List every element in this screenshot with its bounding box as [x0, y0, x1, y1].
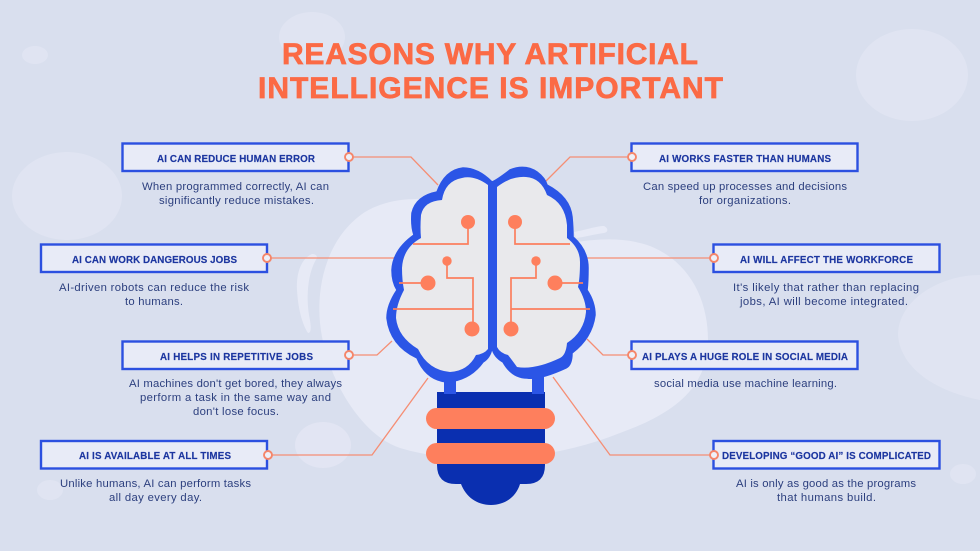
panel: repetitive jobs: don't lose focus. — [193, 406, 279, 418]
panel: social media: AI PLAYS A HUGE ROLE IN SOCIAL MEDIA — [642, 352, 848, 363]
panel: available at all times: AI IS AVAILABLE AT ALL TIMES — [79, 451, 231, 462]
panel: good AI is complicated: AI is only as good as the programs — [736, 478, 916, 490]
panel: dangerous jobs: AI-driven robots can reduce the risk — [59, 282, 249, 294]
panel: dangerous jobs — [41, 244, 271, 308]
icon: light bulb base — [426, 392, 555, 505]
title: INTELLIGENCE IS IMPORTANT — [258, 72, 723, 105]
panel: available at all times: all day every day. — [109, 492, 202, 504]
icon: brain — [387, 167, 595, 394]
panel: works faster: AI WORKS FASTER THAN HUMANS — [659, 154, 831, 165]
panel: good AI is complicated: DEVELOPING “GOOD AI” IS COMPLICATED — [722, 451, 931, 462]
panel: repetitive jobs — [122, 342, 353, 418]
panel: affect the workforce — [710, 244, 940, 308]
panel: affect the workforce: It's likely that rather than replacing — [733, 282, 919, 294]
panel: social media: social media use machine learning. — [654, 378, 837, 390]
panel: repetitive jobs: perform a task in the same way and — [140, 392, 331, 404]
panel: good AI is complicated: that humans build. — [777, 492, 876, 504]
panel: dangerous jobs: to humans. — [125, 296, 183, 308]
panel: affect the workforce: AI WILL AFFECT THE WORKFORCE — [740, 255, 913, 266]
panel: affect the workforce: jobs, AI will become integrated. — [739, 296, 908, 308]
connector lines — [267, 157, 714, 455]
panel: repetitive jobs: AI machines don't get bored, they always — [129, 378, 342, 390]
panel: reduce human error: When programmed correctly, AI can — [142, 181, 329, 193]
panel: reduce human error — [122, 144, 353, 207]
panel: reduce human error: significantly reduce mistakes. — [159, 195, 314, 207]
panel: social media — [628, 342, 858, 390]
circuit traces — [393, 215, 590, 336]
panel: works faster: for organizations. — [699, 195, 791, 207]
panel: reduce human error: AI CAN REDUCE HUMAN ERROR — [157, 154, 315, 165]
panel: dangerous jobs: AI CAN WORK DANGEROUS JOBS — [72, 255, 237, 266]
panel: works faster — [628, 144, 858, 207]
panel: works faster: Can speed up processes and decisions — [643, 181, 847, 193]
panel: good AI is complicated — [710, 441, 940, 504]
panel: available at all times: Unlike humans, AI can perform tasks — [60, 478, 251, 490]
panel: available at all times — [41, 441, 272, 504]
title — [258, 38, 723, 105]
title: REASONS WHY ARTIFICIAL — [282, 38, 698, 71]
panel: repetitive jobs: AI HELPS IN REPETITIVE JOBS — [160, 352, 313, 363]
